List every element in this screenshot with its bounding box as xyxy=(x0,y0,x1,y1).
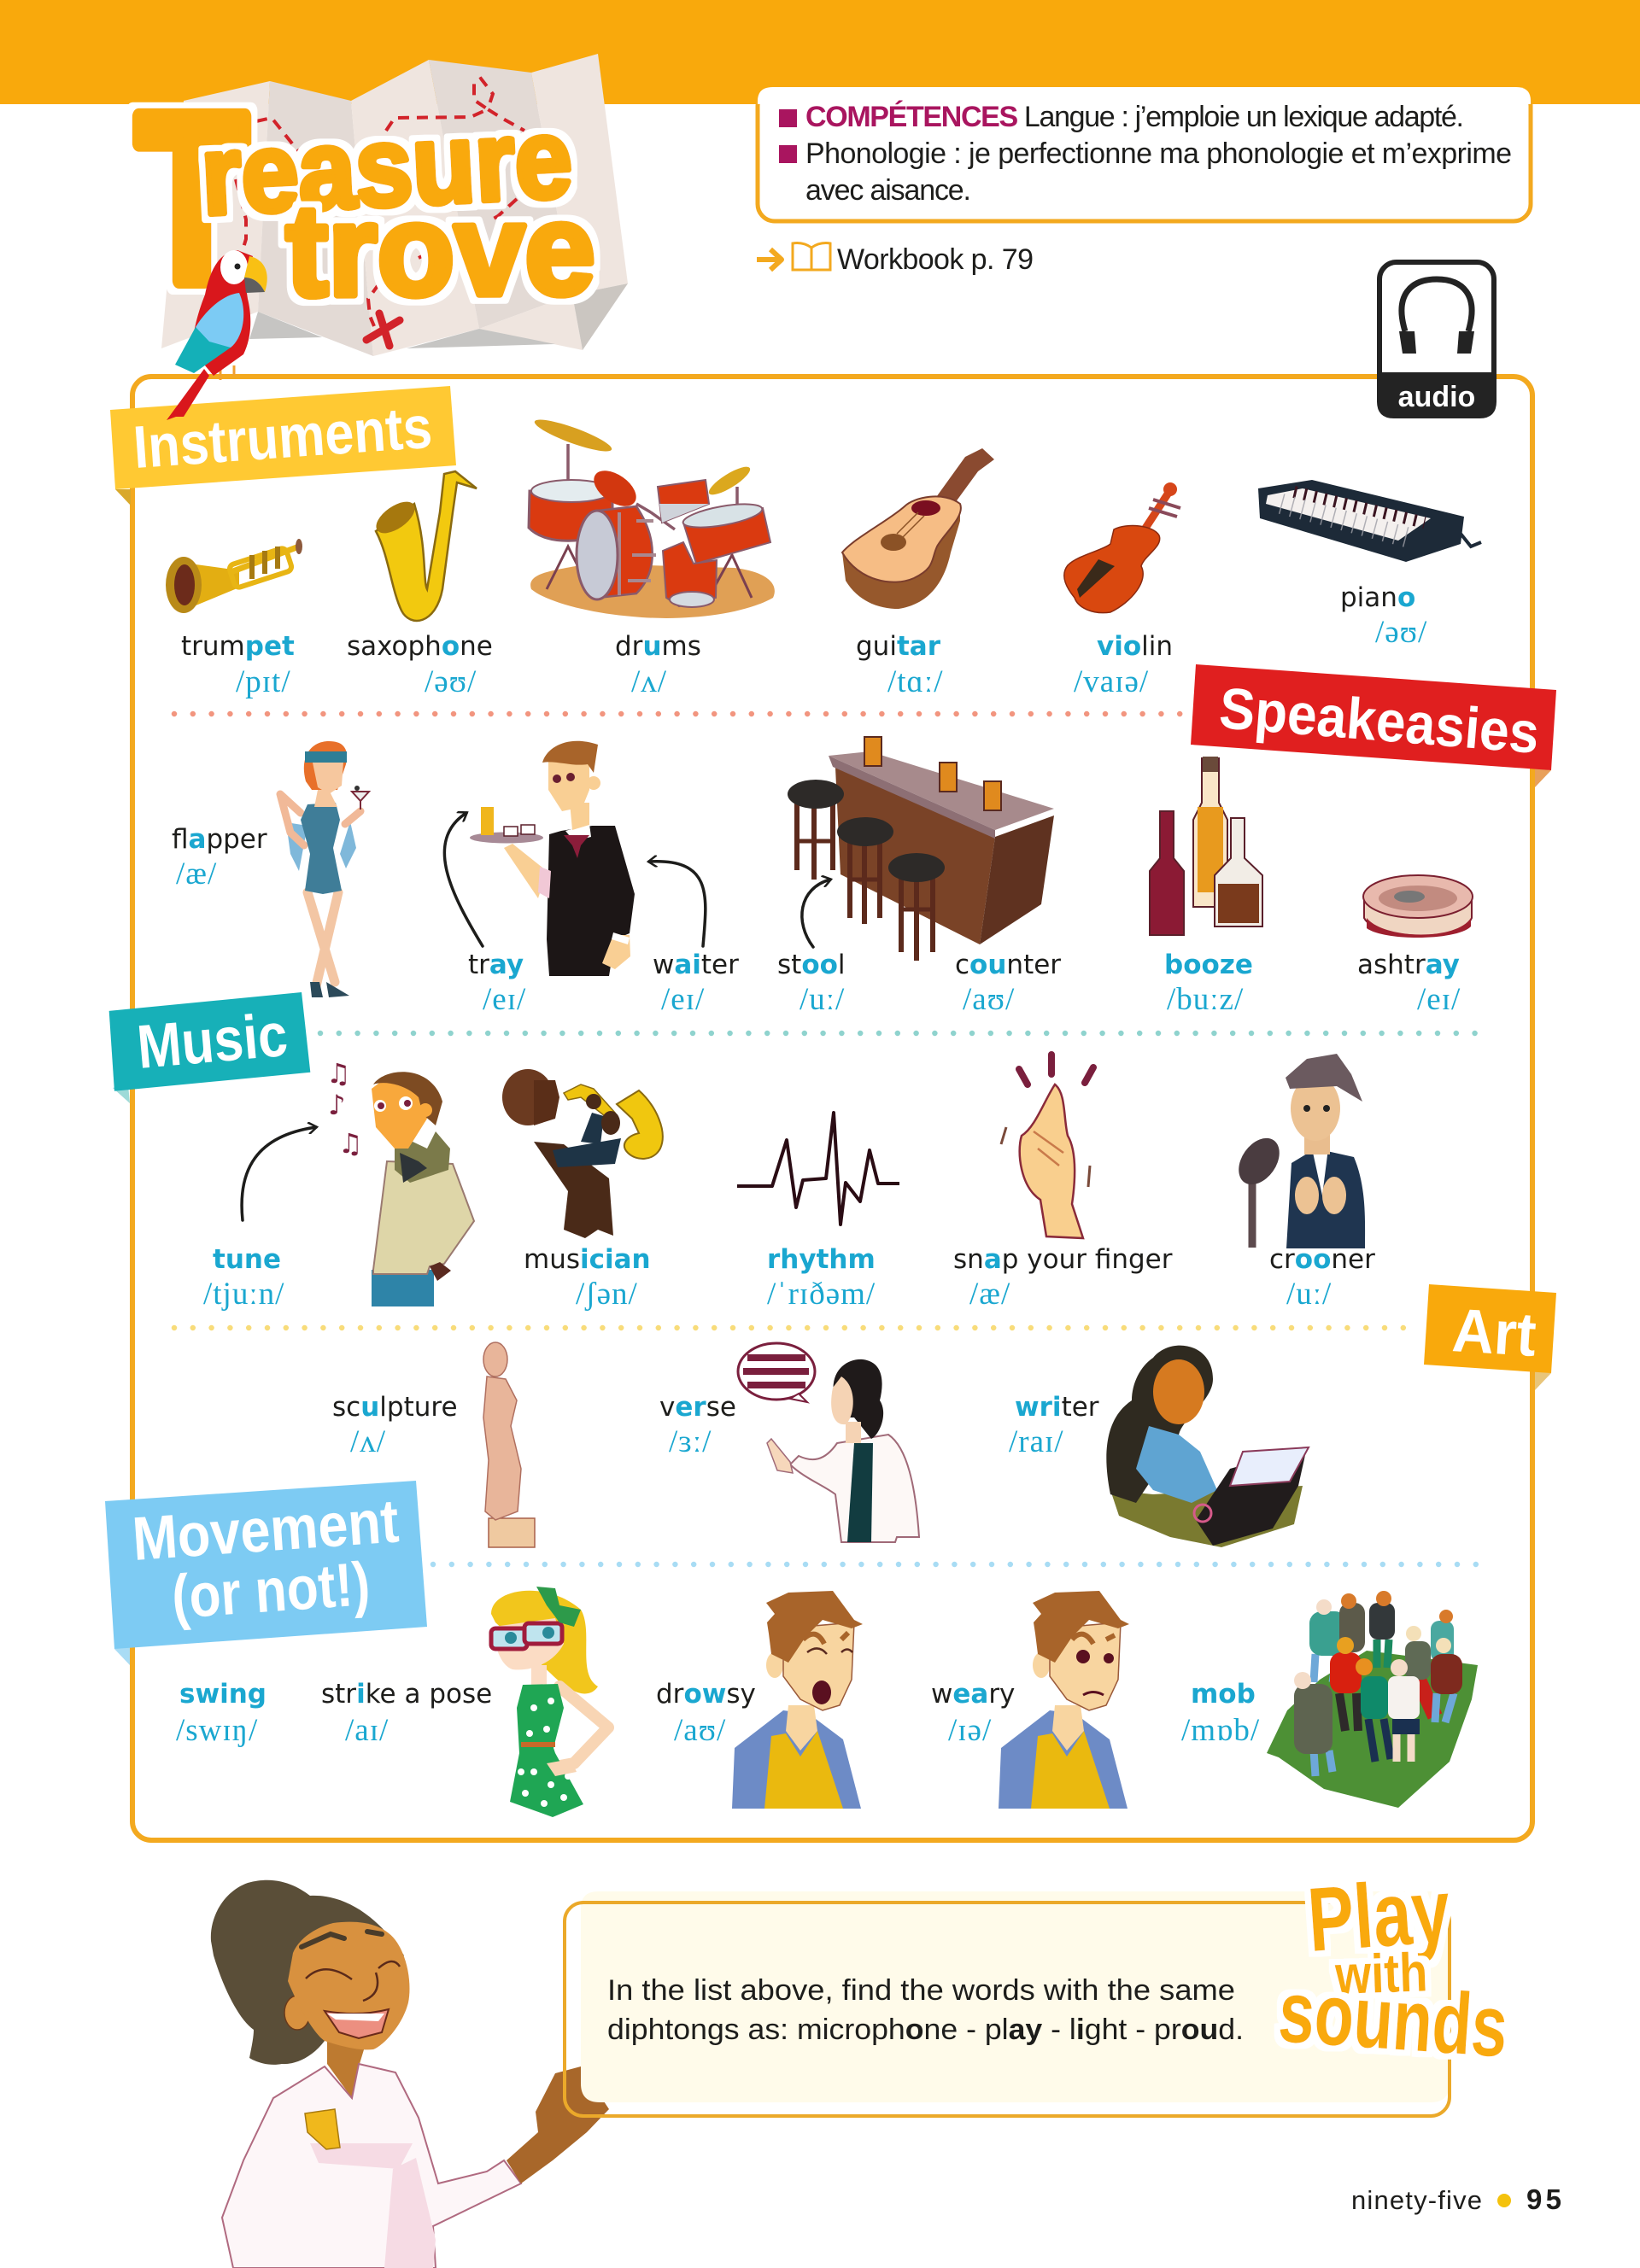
illustration: mob on grass xyxy=(1267,1591,1478,1808)
word: stool xyxy=(777,950,846,1017)
illustration: writer at typewriter xyxy=(1106,1346,1309,1547)
word: musician: /ʃən/ xyxy=(576,1277,638,1312)
word: waiter: /eɪ/ xyxy=(661,982,705,1017)
word: snap your finger: /æ/ xyxy=(969,1277,1010,1312)
word: mob: /mɒb/ xyxy=(1181,1713,1260,1748)
word: piano: piano xyxy=(1340,582,1415,613)
illustration: saxophone musician xyxy=(502,1069,663,1238)
icon: parrot xyxy=(167,250,267,420)
word: waiter xyxy=(653,950,739,1017)
word: verse: verse xyxy=(659,1392,736,1423)
word: musician xyxy=(524,1244,651,1312)
audio icon xyxy=(1377,262,1496,418)
icon: music notes: ♫ xyxy=(338,1127,363,1160)
icon: piano xyxy=(1258,480,1481,562)
word: flapper xyxy=(172,824,267,891)
word: stool: stool xyxy=(777,950,846,980)
word: weary: /ɪə/ xyxy=(948,1713,992,1748)
divider: movement xyxy=(433,1562,1478,1567)
illustration: bottles xyxy=(1150,757,1262,935)
music banner xyxy=(108,992,311,1103)
play with sounds panel: In the list above, find the words with the same xyxy=(607,1974,1235,2007)
word: trumpet: /pɪt/ xyxy=(236,664,291,699)
header band xyxy=(0,0,1640,104)
illustration: ashtray xyxy=(1363,875,1473,938)
arrow: to waiter xyxy=(649,862,706,946)
word: saxophone: /əʊ/ xyxy=(425,664,477,699)
treasure map xyxy=(161,54,628,356)
word: writer: /raɪ/ xyxy=(1009,1424,1064,1459)
title: Treasure trove: reasure xyxy=(198,95,575,238)
title: Treasure trove xyxy=(137,66,595,331)
word: swing xyxy=(176,1679,266,1748)
word: counter xyxy=(955,950,1061,1017)
word: rhythm xyxy=(767,1244,876,1312)
word: tune: /tjuːn/ xyxy=(203,1277,284,1312)
word: guitar: /tɑː/ xyxy=(887,664,943,699)
word: strike a pose: /aɪ/ xyxy=(345,1713,389,1748)
word: flapper: flapper xyxy=(172,824,267,855)
word: rhythm: /ˈrɪðəm/ xyxy=(767,1277,876,1312)
art banner: Art xyxy=(1450,1296,1538,1370)
word: snap your finger: snap your finger xyxy=(953,1244,1173,1275)
competences box: avec aisance. xyxy=(805,174,971,207)
play with sounds heading: with xyxy=(1333,1941,1428,2006)
illustration: crooner xyxy=(1230,1054,1365,1248)
word: counter: counter xyxy=(955,950,1061,980)
word: trumpet: trumpet xyxy=(181,631,295,662)
word: drums: drums xyxy=(615,631,701,662)
illustration: flapper xyxy=(280,741,369,997)
word: saxophone xyxy=(347,631,493,699)
word: writer xyxy=(1009,1392,1099,1459)
icon: saxophone xyxy=(371,471,477,621)
word: piano: /əʊ/ xyxy=(1375,615,1427,650)
word: violin xyxy=(1074,631,1173,699)
word: rhythm: rhythm xyxy=(767,1244,876,1275)
word: sculpture xyxy=(332,1392,458,1459)
icon: trumpet xyxy=(166,539,302,613)
title: Treasure trove: trove xyxy=(285,177,595,324)
illustration: smiling woman xyxy=(211,1880,609,2268)
instruments banner xyxy=(110,386,456,506)
word: strike a pose: strike a pose xyxy=(321,1679,492,1710)
competences box: COMPÉTENCES Langue : j’emploie un lexique adapté. xyxy=(805,101,1464,133)
illustration: snapping fingers xyxy=(1001,1055,1093,1238)
illustration: rhythm line xyxy=(737,1113,899,1225)
page number: ninety-five xyxy=(1351,2185,1482,2215)
title: Treasure trove: T xyxy=(137,66,247,331)
word: sculpture: sculpture xyxy=(332,1392,458,1423)
word: verse xyxy=(659,1392,736,1459)
illustration: waiter with tray xyxy=(470,741,635,976)
word: crooner xyxy=(1269,1244,1375,1312)
word: booze: /buːz/ xyxy=(1167,982,1244,1017)
music banner: Music xyxy=(134,1001,290,1082)
page number xyxy=(1351,2183,1561,2215)
word: violin: /vaɪə/ xyxy=(1074,664,1149,699)
icon: drums xyxy=(529,414,775,618)
word: stool: /uː/ xyxy=(800,982,845,1017)
divider: music xyxy=(320,1031,1478,1036)
word: ashtray: ashtray xyxy=(1357,950,1460,980)
competences box xyxy=(758,87,1531,221)
word: ashtray: /eɪ/ xyxy=(1417,982,1461,1017)
word: trumpet xyxy=(181,631,295,699)
word: weary xyxy=(931,1679,1015,1748)
divider: art xyxy=(174,1325,1419,1330)
play with sounds heading: sounds xyxy=(1275,1962,1511,2076)
movement banner xyxy=(105,1481,427,1665)
word: flapper: /æ/ xyxy=(176,856,217,891)
art banner xyxy=(1424,1284,1556,1390)
illustration: girl striking a pose xyxy=(491,1587,608,1817)
movement banner: Movement xyxy=(131,1487,401,1574)
word: guitar xyxy=(856,631,943,699)
word: ashtray xyxy=(1357,950,1461,1017)
word: waiter: waiter xyxy=(653,950,739,980)
word: verse: /ɜː/ xyxy=(669,1424,712,1459)
illustration: bar counter and stools xyxy=(788,737,1054,961)
word: snap your finger xyxy=(953,1244,1173,1312)
word: tray: tray xyxy=(468,950,524,980)
competences box: Phonologie : je perfectionne ma phonologie et m’exprime xyxy=(805,137,1512,170)
workbook reference: Workbook p. 79 xyxy=(837,243,1034,276)
icon: music notes xyxy=(326,1057,363,1160)
arrow: to stool xyxy=(802,880,830,947)
speakeasies banner: Speakeasies xyxy=(1217,675,1542,766)
word: crooner: crooner xyxy=(1269,1244,1375,1275)
word: tune xyxy=(203,1244,284,1312)
word: guitar: guitar xyxy=(856,631,941,662)
word: mob: mob xyxy=(1191,1679,1256,1710)
word: weary: weary xyxy=(931,1679,1015,1710)
word: booze: booze xyxy=(1164,950,1253,980)
illustration: verse speaker xyxy=(738,1343,919,1542)
illustration: man listening xyxy=(372,1072,474,1306)
illustration: drowsy man xyxy=(732,1591,863,1809)
play with sounds panel: diphtongs as: microph one - play - light - proud. xyxy=(607,2014,1244,2046)
word: writer: writer xyxy=(1015,1392,1099,1423)
word: drowsy: /aʊ/ xyxy=(674,1713,726,1748)
word: sculpture: /ʌ/ xyxy=(350,1424,386,1459)
word: counter: /aʊ/ xyxy=(963,982,1015,1017)
word: violin: violin xyxy=(1097,631,1173,662)
word: tray xyxy=(468,950,526,1017)
word: drowsy xyxy=(656,1679,756,1748)
word: strike a pose xyxy=(321,1679,492,1748)
word: tray: /eɪ/ xyxy=(483,982,526,1017)
word: piano xyxy=(1340,582,1427,650)
word: swing: /swɪŋ/ xyxy=(176,1713,258,1748)
divider: instruments xyxy=(174,711,1192,716)
page number: 95 xyxy=(1526,2183,1561,2215)
word: drums xyxy=(615,631,701,699)
arrow: to tune xyxy=(242,1127,316,1220)
word: mob xyxy=(1181,1679,1260,1748)
arrow: to tray xyxy=(444,813,483,946)
word: drums: /ʌ/ xyxy=(631,664,667,699)
icon: violin xyxy=(1064,482,1180,613)
main vocabulary panel xyxy=(132,377,1532,1840)
play with sounds heading xyxy=(1275,1861,1511,2076)
word: musician: musician xyxy=(524,1244,651,1275)
speakeasies banner xyxy=(1191,664,1556,787)
word: booze xyxy=(1164,950,1253,1017)
audio icon: audio xyxy=(1398,381,1475,413)
icon: music notes: ♫ xyxy=(326,1057,351,1090)
icon: guitar xyxy=(842,448,994,609)
instruments banner: Instruments xyxy=(132,394,434,481)
word: drowsy: drowsy xyxy=(656,1679,756,1710)
icon: music notes: ♪ xyxy=(328,1089,345,1121)
illustration: sculpture xyxy=(483,1342,535,1547)
word: tune: tune xyxy=(213,1244,281,1275)
word: crooner: /uː/ xyxy=(1286,1277,1332,1312)
word: saxophone: saxophone xyxy=(347,631,493,662)
word: swing: swing xyxy=(179,1679,266,1710)
play with sounds heading: Play xyxy=(1304,1861,1453,1971)
illustration: weary man xyxy=(999,1591,1129,1809)
movement banner: (or not!) xyxy=(170,1550,372,1632)
play with sounds panel xyxy=(565,1891,1450,2116)
